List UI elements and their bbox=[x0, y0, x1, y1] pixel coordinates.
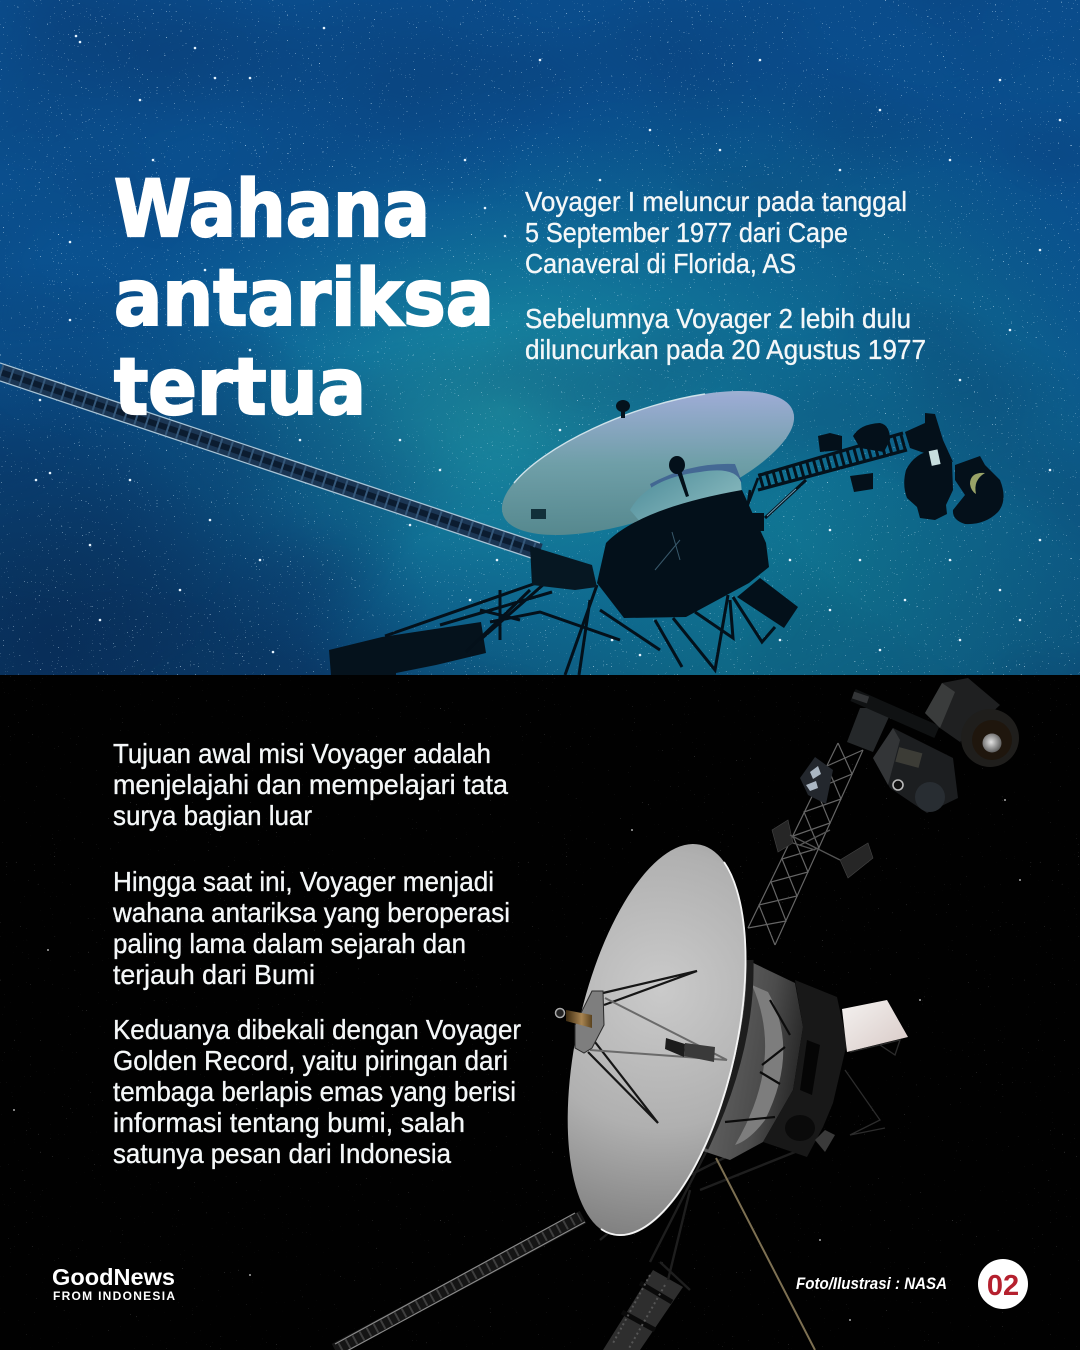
text block: golden record: Golden Record, yaitu piringan dari bbox=[113, 1045, 508, 1076]
text block: launch of Voyager 2: diluncurkan pada 20 Agustus 1977 bbox=[525, 334, 926, 365]
platform highlight bbox=[929, 449, 941, 466]
spacecraft bus bbox=[763, 980, 847, 1157]
bus highlights bbox=[655, 532, 680, 570]
text block: mission goal: menjelajahi dan mempelajari tata bbox=[113, 769, 508, 800]
white panel bbox=[842, 1000, 908, 1052]
right instrument boom bbox=[738, 433, 907, 530]
small bracket bbox=[728, 513, 764, 531]
text block: launch of Voyager 2: Sebelumnya Voyager 2 lebih dulu bbox=[525, 303, 911, 334]
reflective instrument bbox=[800, 757, 833, 804]
parabolic dish bbox=[536, 827, 778, 1253]
dark ring behind dish bbox=[705, 960, 750, 1148]
text block: launch of Voyager I: Voyager I meluncur pada tanggal bbox=[525, 186, 907, 217]
spacecraft: Voyager 3D render bbox=[335, 678, 1019, 1350]
title: antariksa bbox=[114, 254, 494, 344]
text block: launch of Voyager I: 5 September 1977 dari Cape bbox=[525, 217, 848, 248]
panel: lower black section bbox=[0, 675, 1080, 1350]
astromast lattice bbox=[748, 743, 863, 945]
spacecraft: Voyager silhouette bbox=[0, 361, 1004, 675]
text block: mission goal: Tujuan awal misi Voyager adalah bbox=[113, 738, 491, 769]
parabolic dish bbox=[485, 361, 811, 565]
small dish marking bbox=[531, 509, 546, 519]
text block: longest operating bbox=[112, 866, 510, 990]
page number badge bbox=[978, 1259, 1028, 1309]
lower struts bbox=[600, 1150, 800, 1290]
dish rim highlight bbox=[514, 394, 705, 483]
text block: longest operating: wahana antariksa yang beroperasi bbox=[112, 897, 510, 928]
body cylinder bbox=[700, 960, 803, 1160]
logo: GoodNews from Indonesia: GoodNews bbox=[52, 1264, 175, 1290]
text block: longest operating: Hingga saat ini, Voyager menjadi bbox=[113, 866, 494, 897]
text block: golden record bbox=[113, 1014, 521, 1169]
title: Wahana bbox=[114, 165, 430, 255]
dish rim highlight bbox=[601, 862, 746, 1235]
magnetometer boom bbox=[0, 363, 540, 561]
cylinder under dish bbox=[630, 470, 744, 545]
feed support bbox=[669, 456, 689, 497]
text block: mission goal bbox=[113, 738, 508, 831]
cylinder light crescent bbox=[735, 985, 783, 1145]
feed ring bbox=[556, 1008, 564, 1018]
panel struts bbox=[845, 1040, 900, 1135]
boom housing box bbox=[530, 546, 597, 590]
lower boom bbox=[335, 1213, 585, 1350]
gold feed tube bbox=[566, 1010, 592, 1028]
text block: longest operating: paling lama dalam sejarah dan bbox=[113, 928, 466, 959]
panel: top space scene bbox=[0, 0, 1080, 675]
starry sky background bbox=[0, 0, 1080, 675]
boom side instruments bbox=[772, 820, 873, 878]
legs bbox=[565, 585, 775, 675]
text block: golden record: informasi tentang bumi, salah bbox=[113, 1107, 465, 1138]
body struts bbox=[725, 1000, 790, 1122]
text block: launch of Voyager I: Canaveral di Florida, AS bbox=[525, 248, 796, 279]
side box bbox=[737, 578, 798, 628]
RTG truss bbox=[385, 577, 620, 652]
centre tube bbox=[665, 1038, 715, 1062]
scan platform instruments bbox=[818, 413, 1004, 524]
scan platform bbox=[847, 678, 1019, 813]
bus panels bbox=[785, 1040, 835, 1152]
text block: launch of Voyager 2 bbox=[525, 303, 926, 365]
text block: golden record: satunya pesan dari Indonesia bbox=[113, 1138, 451, 1169]
black star background bbox=[0, 675, 1080, 1350]
photo credit: Foto/Ilustrasi : NASA bbox=[796, 1274, 947, 1293]
text block: launch of Voyager I bbox=[525, 186, 907, 279]
RTG cylinder bbox=[329, 622, 486, 675]
logo: GoodNews from Indonesia bbox=[52, 1264, 175, 1303]
title: tertua bbox=[114, 343, 366, 433]
antenna rod bbox=[716, 1158, 815, 1350]
title bbox=[114, 165, 494, 433]
grey support rods bbox=[590, 998, 727, 1060]
feed struts bbox=[588, 971, 697, 1123]
text block: golden record: tembaga berlapis emas yang berisi bbox=[113, 1076, 516, 1107]
text block: mission goal: surya bagian luar bbox=[113, 800, 312, 831]
text block: longest operating: terjauh dari Bumi bbox=[113, 959, 315, 990]
RTG cylinder bbox=[603, 1270, 683, 1350]
spacecraft bus bbox=[597, 490, 769, 618]
logo: GoodNews from Indonesia: FROM INDONESIA bbox=[53, 1289, 175, 1303]
page number badge: 02 bbox=[987, 1270, 1019, 1302]
text block: golden record: Keduanya dibekali dengan Voyager bbox=[113, 1014, 521, 1045]
antenna knob on dish bbox=[616, 400, 630, 418]
lens tint bbox=[970, 473, 985, 494]
instrument struts bbox=[790, 830, 840, 860]
feed horn plate bbox=[575, 991, 604, 1053]
dish shadow bbox=[650, 464, 742, 498]
